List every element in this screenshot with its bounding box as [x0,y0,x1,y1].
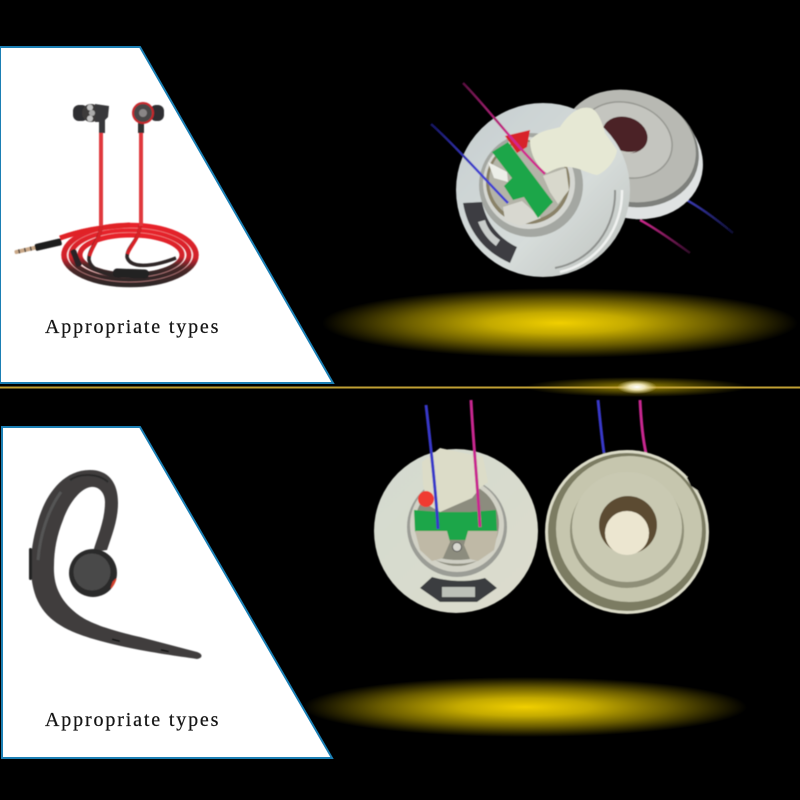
lower driver pair [374,400,714,614]
solder pads [488,162,508,182]
back wires [683,198,733,233]
earpiece [69,549,117,597]
white glue [530,108,617,175]
right earbud [133,103,164,133]
glow: upper yellow spotlight [322,288,798,358]
cable coil [60,225,196,284]
divider line with flare [0,377,800,397]
upper driver pair [431,73,733,277]
green circuit board [414,510,497,540]
wires [99,130,103,226]
back driver disc [545,73,719,237]
green circuit board [492,142,553,218]
inline microphone [113,268,149,279]
side slider [70,249,82,267]
mic slots [112,639,120,642]
front driver disc [456,103,630,277]
dark label patch [420,577,497,602]
dark label patch [463,202,517,263]
panel: lower white trapezoid [2,427,332,758]
voice coil cup [479,133,583,237]
red dot [418,491,434,507]
white glue [422,448,488,512]
right driver disc, rear [545,450,714,614]
left driver wires [426,405,438,529]
front wires [463,83,545,174]
red dot [505,130,530,153]
icon: wired red earphones [14,103,196,284]
audio jack [14,238,62,256]
solder pads [415,531,450,561]
notch [687,462,714,496]
left earbud [73,104,109,133]
left driver disc, front [374,448,538,613]
panel: upper white trapezoid [0,47,333,383]
glow: lower yellow spotlight [303,677,747,737]
label: appropriate types: Appropriate types [45,709,220,731]
label: appropriate types: Appropriate types [45,316,220,338]
right driver wires [598,400,604,453]
icon: bluetooth ear-hook headset [29,470,202,659]
